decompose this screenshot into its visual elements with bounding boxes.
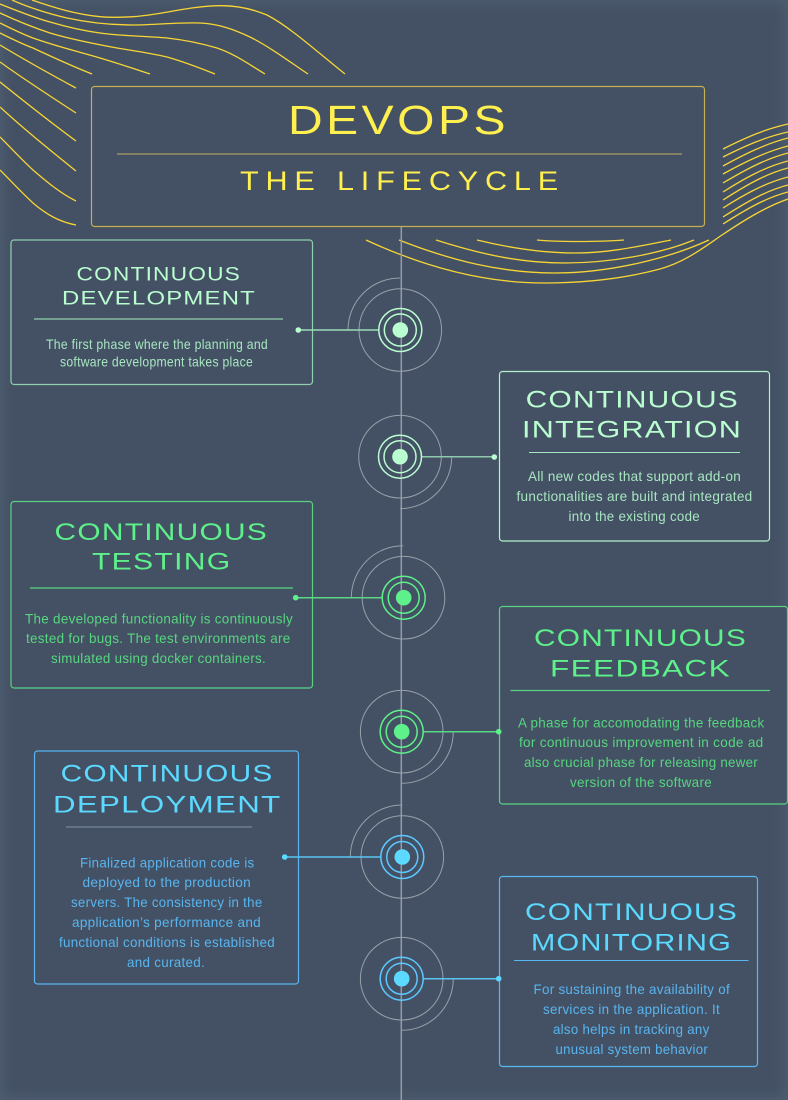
- heading: continuous monitoring: [525, 899, 738, 956]
- description: continuous feedback: [518, 714, 765, 790]
- node 6: monitoring: [360, 937, 502, 1030]
- panel: continuous development: [11, 240, 312, 384]
- panel: continuous feedback: [500, 606, 788, 804]
- description: continuous feedback: A phase for accomodating the feedback: [518, 714, 765, 730]
- description: continuous integration: into the existing code: [568, 508, 700, 524]
- heading: continuous monitoring: CONTINUOUS: [525, 899, 738, 926]
- heading: continuous feedback: CONTINUOUS: [534, 625, 747, 652]
- node 3: testing: [293, 546, 445, 639]
- decorative wave lines: top left: [0, 0, 345, 225]
- description: continuous deployment: application’s performance and: [72, 914, 261, 930]
- description: continuous testing: tested for bugs. The test environments are: [26, 630, 290, 646]
- description: continuous monitoring: For sustaining the availability of: [534, 981, 730, 997]
- heading: continuous deployment: DEPLOYMENT: [53, 792, 282, 819]
- title panel: [92, 86, 704, 226]
- panel: continuous testing: [11, 502, 312, 688]
- description: continuous development: The first phase where the planning and: [46, 336, 268, 352]
- description: continuous deployment: servers. The consistency in the: [71, 894, 262, 910]
- heading: continuous development: CONTINUOUS: [76, 264, 241, 286]
- description: continuous integration: [516, 468, 752, 524]
- heading: continuous development: DEVELOPMENT: [62, 288, 256, 310]
- decorative wave lines: right and bottom: [366, 124, 788, 283]
- panel: continuous deployment: [34, 751, 298, 984]
- description: continuous deployment: functional conditions is established: [59, 934, 275, 950]
- description: continuous deployment: [59, 854, 275, 970]
- heading: continuous development: [62, 264, 256, 310]
- description: continuous development: [46, 336, 268, 370]
- description: continuous testing: simulated using docker containers.: [51, 650, 266, 666]
- description: continuous testing: [25, 610, 293, 666]
- heading: continuous testing: [54, 519, 268, 575]
- heading: continuous feedback: [534, 625, 747, 683]
- description: continuous development: software development takes place: [60, 354, 253, 370]
- description: continuous monitoring: [534, 981, 730, 1057]
- description: continuous feedback: for continuous improvement in code ad: [519, 734, 764, 750]
- heading: continuous deployment: [53, 761, 282, 819]
- heading: continuous testing: TESTING: [92, 548, 232, 575]
- description: continuous integration: functionalities are built and integrated: [516, 488, 752, 504]
- heading: continuous testing: CONTINUOUS: [54, 519, 268, 546]
- panel: continuous integration: [500, 372, 770, 541]
- heading: continuous feedback: FEEDBACK: [550, 656, 731, 683]
- description: continuous monitoring: unusual system behavior: [556, 1041, 708, 1057]
- panel: continuous monitoring: [500, 876, 758, 1066]
- description: continuous deployment: and curated.: [127, 954, 205, 970]
- heading: continuous deployment: CONTINUOUS: [61, 761, 274, 788]
- node 1: development: [296, 278, 442, 371]
- heading: continuous monitoring: MONITORING: [531, 929, 732, 956]
- description: continuous monitoring: services in the application. It: [543, 1001, 720, 1017]
- timeline vertical axis: [400, 227, 402, 1100]
- heading: continuous integration: CONTINUOUS: [526, 386, 739, 413]
- subtitle: THE LIFECYCLE: THE LIFECYCLE: [240, 166, 565, 196]
- description: continuous feedback: also crucial phase for releasing newer: [524, 754, 758, 770]
- node 4: feedback: [360, 690, 502, 783]
- description: continuous integration: All new codes that support add-on: [528, 468, 741, 484]
- description: continuous testing: The developed functionality is continuously: [25, 610, 293, 626]
- description: continuous monitoring: also helps in tracking any: [553, 1021, 710, 1037]
- node 5: deployment: [282, 805, 444, 898]
- title: DEVOPS: DEVOPS: [288, 97, 509, 143]
- heading: continuous integration: INTEGRATION: [522, 417, 742, 444]
- heading: continuous integration: [522, 386, 742, 444]
- description: continuous deployment: deployed to the production: [82, 874, 251, 890]
- node 2: integration: [359, 415, 497, 509]
- description: continuous feedback: version of the software: [570, 774, 712, 790]
- description: continuous deployment: Finalized application code is: [80, 854, 254, 870]
